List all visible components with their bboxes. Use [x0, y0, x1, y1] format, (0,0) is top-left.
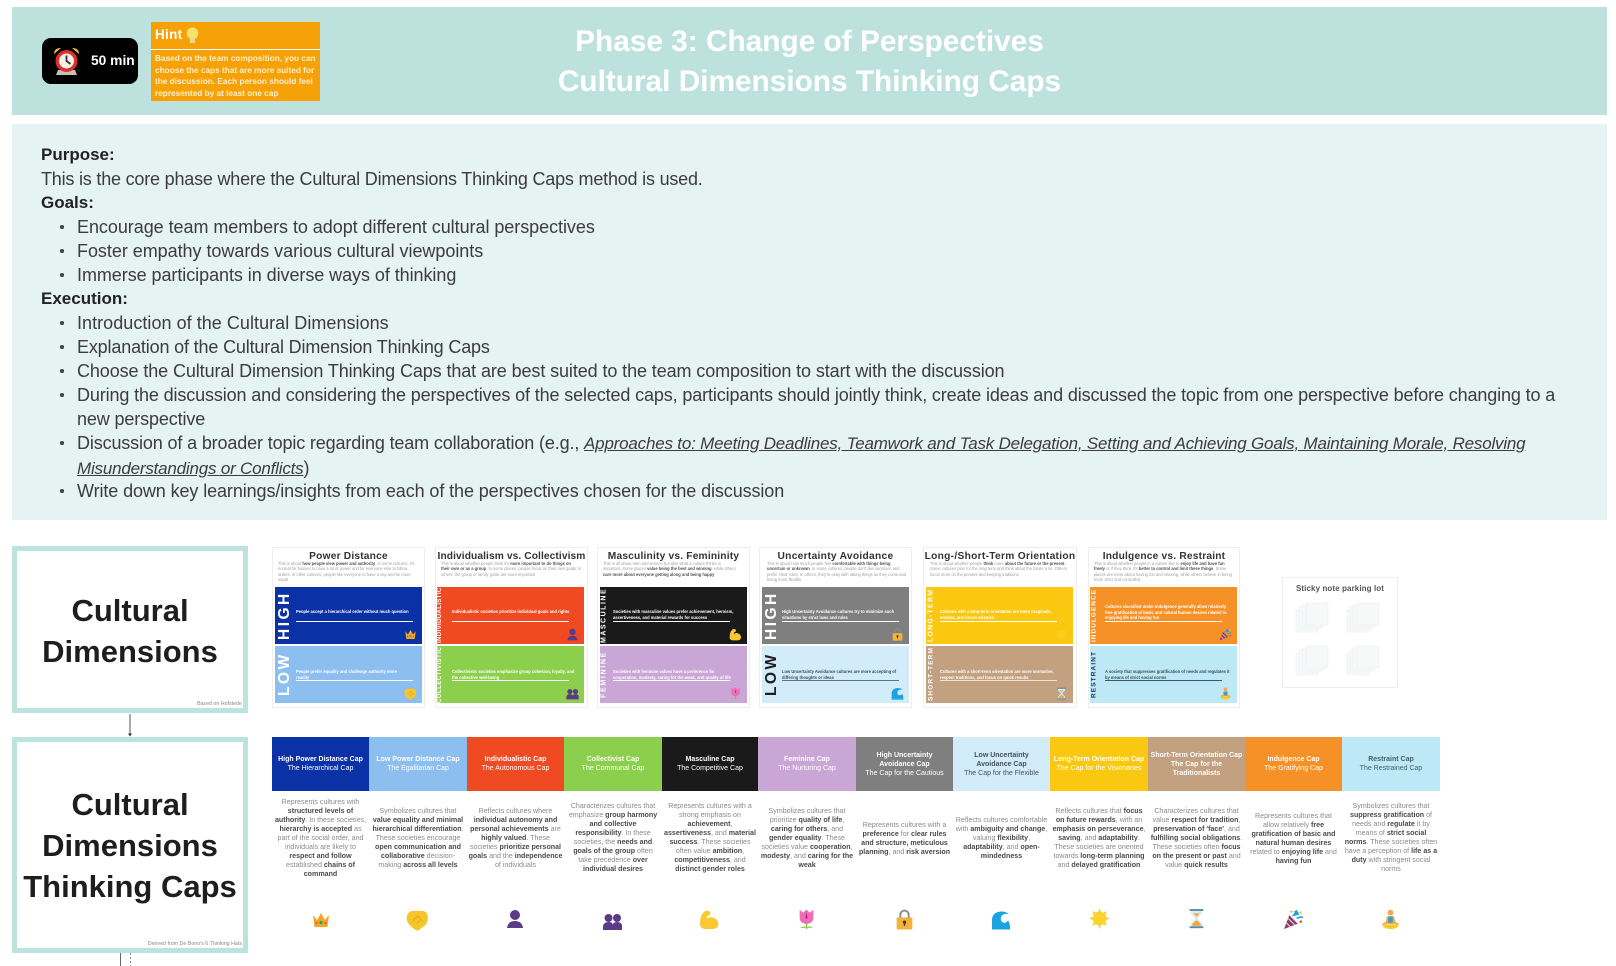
- timer label: 50 min: [91, 53, 135, 68]
- card title: Uncertainty Avoidance: [778, 551, 893, 562]
- cap header: Short-Term Orientation: The Cap for the: [1171, 760, 1222, 768]
- cap text: Indulgence: allow relatively free: [1263, 821, 1324, 829]
- cap text: Masculine: distinct gender roles: [675, 865, 745, 873]
- cap text: Short-Term Orientation: [1150, 807, 1242, 869]
- cap text: Restraint: suppress gratification of: [1350, 811, 1432, 819]
- card description: freely or if they think it's better to control and limit these things. Some: [1094, 566, 1226, 571]
- icon: group of people: [603, 914, 622, 930]
- cap text: Collectivist: responsibility. In these: [575, 829, 651, 837]
- cap text: Collectivist: goals of the group often: [573, 847, 653, 855]
- block: high uncertainty avoidance: [762, 587, 909, 644]
- block: low power distance: People prefer equality and challenge authority more: [296, 669, 397, 674]
- cap header: High Uncertainty Avoidance: Avoidance Cap: [879, 760, 930, 768]
- cap header: Low Power Distance: Low Power Distance Cap: [376, 756, 460, 763]
- text: purpose, goals and execution: Choose the Cultural Dimension Thinking Caps that are best suited to the team composition to start with the discussion: [77, 360, 1004, 380]
- card description: [603, 561, 736, 577]
- cap text: Low Power Distance: Symbolizes cultures that: [380, 807, 456, 815]
- icon: party popper: [1284, 910, 1304, 929]
- block: high uncertainty avoidance: High Uncertainty Avoidance cultures try to minimize such: [782, 609, 894, 614]
- cap header: Restraint: The Restrained Cap: [1360, 765, 1422, 772]
- cap text: High Power Distance: Represents cultures with: [282, 798, 359, 806]
- hint heading: Hint: [155, 27, 182, 42]
- cap header: High Power Distance: The Hierarchical Cap: [288, 765, 353, 772]
- cap text: Restraint: duty with stringent social: [1352, 856, 1430, 864]
- title: Cultural Dimensions Thinking Caps: [558, 65, 1061, 98]
- card: Indulgence vs. Restraint: [1088, 547, 1240, 708]
- cap text: Collectivist: and collective: [590, 820, 636, 828]
- cap text: Masculine: achievement,: [688, 820, 732, 828]
- cap text: Long-Term Orientation: saving, and adaptability.: [1058, 834, 1140, 842]
- cap header: Indulgence: [1245, 737, 1342, 791]
- text: purpose, goals and execution: Execution:: [41, 288, 128, 308]
- card description: This is about whether people think more about the future or the present.: [930, 561, 1066, 566]
- block: masculine: Societies with masculine values prefer achievement, heroism,: [613, 609, 733, 614]
- icon: single person: [507, 910, 523, 928]
- card title: Masculinity vs. Femininity: [608, 551, 739, 562]
- block: high power distance: People accept a hierarchical order without much question: [296, 609, 409, 614]
- block: short-term: SHORT-TERM: [928, 648, 934, 702]
- cap text: High Power Distance: part of the social order, and: [278, 834, 363, 842]
- cap text: Collectivist: take precedence over: [578, 856, 648, 864]
- cap text: Indulgence: [1250, 812, 1337, 865]
- cap text: Short-Term Orientation: value quick results: [1165, 861, 1228, 869]
- cap header: Collectivist: Collectivist Cap: [587, 756, 639, 763]
- cap text: High Power Distance: hierarchy is accepted as: [279, 825, 362, 833]
- cap header: High Uncertainty Avoidance: [856, 737, 953, 791]
- cap text: Low Power Distance: hierarchical differentiation.: [372, 825, 464, 833]
- text: purpose, goals and execution: Goals:: [41, 192, 94, 212]
- cap header: Feminine: Feminine Cap: [784, 756, 830, 763]
- title: [558, 25, 1061, 98]
- block: high power distance: [275, 587, 422, 644]
- icon: wave: [992, 912, 1010, 930]
- cap text: High Uncertainty Avoidance: and structure, meticulous: [861, 839, 948, 847]
- icon: crown: [313, 913, 329, 927]
- cap header: Indulgence: The Gratifying Cap: [1264, 765, 1323, 772]
- cap text: Individualistic: Reflects cultures where: [479, 807, 552, 815]
- cap header: Feminine: [758, 737, 856, 791]
- icon: sun: [1089, 908, 1110, 929]
- text: purpose, goals and execution: Purpose:: [41, 144, 115, 164]
- hint text: Based on the team composition, you can: [155, 53, 316, 63]
- block: restraint: by means of strict social norms: [1105, 675, 1166, 680]
- block: feminine: [600, 646, 747, 703]
- cap text: Long-Term Orientation: [1052, 807, 1146, 869]
- block: feminine: Societies with feminine values have a preference for: [613, 669, 715, 674]
- cap text: Masculine: [664, 802, 756, 873]
- cap text: Low Uncertainty Avoidance: [956, 816, 1047, 860]
- card description: This is all about men and women but also what a culture thinks is: [603, 561, 721, 566]
- icon: alarm clock: [54, 48, 79, 75]
- cap text: Masculine: Represents cultures with a: [668, 802, 752, 810]
- box: Cultural Dimensions Thinking Caps: Cultural: [71, 787, 189, 822]
- block: masculine: assertiveness, and material rewards for success: [613, 615, 707, 620]
- cap text: High Power Distance: [275, 798, 366, 878]
- cap header: Restraint: [1342, 737, 1440, 791]
- block: collectivistic: COLLECTIVISTIC: [437, 646, 443, 703]
- card: Long-/Short-Term Orientation: [923, 547, 1077, 708]
- cap text: Long-Term Orientation: towards long-term planning: [1053, 852, 1145, 860]
- panel: sticky note parking lot: [1282, 577, 1398, 688]
- hint box: [151, 22, 320, 101]
- cap header: High Uncertainty Avoidance: High Uncertainty: [876, 752, 932, 758]
- block: indulgence: enjoying life and having fun: [1105, 615, 1159, 620]
- cap text: Low Uncertainty Avoidance: Reflects cultures comfortable: [956, 816, 1047, 824]
- card description: prefer clear rules. In others, they're okay with taking things as they come and: [767, 572, 906, 577]
- block: high power distance: HIGH: [276, 591, 293, 640]
- block: masculine: MASCULINE: [600, 588, 608, 643]
- cap header: High Power Distance: [272, 737, 369, 791]
- card description: This is about whether people in a culture like to enjoy life and have fun: [1094, 561, 1225, 566]
- cap text: High Uncertainty Avoidance: [859, 821, 950, 856]
- cap header: Long-Term Orientation: The Cap for the Visionaries: [1057, 765, 1141, 772]
- cap text: Restraint: [1345, 802, 1438, 873]
- card description: others, the group or family goals are more important: [441, 572, 535, 577]
- cap text: Short-Term Orientation: Characterizes cultures that: [1154, 807, 1239, 815]
- cap text: Low Power Distance: value equality and minimal: [373, 816, 463, 824]
- cap text: Short-Term Orientation: fulfilling social obligations.: [1151, 834, 1242, 842]
- cap header: Low Uncertainty Avoidance: Low Uncertainty: [974, 752, 1029, 758]
- block: masculine: [600, 587, 747, 644]
- block: low uncertainty avoidance: differing thoughts or ideas: [782, 675, 834, 680]
- attribution: De Bono: Derived from De Bono's 6 Thinking Hats: [148, 941, 242, 947]
- cap header: High Power Distance: High Power Distance Cap: [278, 756, 363, 763]
- cap text: High Uncertainty Avoidance: planning, and risk aversion: [859, 848, 950, 856]
- cap text: High Power Distance: structured levels of: [288, 807, 353, 815]
- block: indulgence: free gratification of basic and natural human desires related to: [1105, 610, 1226, 615]
- box: Cultural Dimensions Thinking Caps: [12, 737, 248, 953]
- cap text: Long-Term Orientation: These societies are oriented: [1054, 843, 1144, 851]
- text: purpose, goals and execution: Explanation of the Cultural Dimension Thinking Caps: [77, 336, 490, 356]
- block: long-term: [926, 587, 1073, 644]
- cap header: Feminine: The Nurturing Cap: [778, 765, 836, 772]
- cap text: Masculine: competitiveness, and: [674, 856, 746, 864]
- cap text: Individualistic: highly valued. These: [481, 834, 550, 842]
- block: low power distance: readily: [296, 675, 309, 680]
- cap text: Feminine: [761, 807, 853, 869]
- block: restraint: RESTRAINT: [1090, 651, 1098, 698]
- cap text: Individualistic: individual autonomy and: [474, 816, 557, 824]
- card description: This is about how people view power and authority. In some cultures, it's: [278, 561, 415, 566]
- card: Uncertainty Avoidance: [759, 547, 912, 708]
- block: collectivistic: [437, 646, 584, 703]
- hint text: the discussion. Each person should feel: [155, 76, 313, 86]
- card description: their own or as a group. In some places, people focus on their own goals; in: [441, 566, 581, 571]
- card description: uncertain or unknown. In some cultures, people don't like surprises and: [767, 566, 900, 571]
- block: collectivistic: the collective well-being: [452, 675, 499, 680]
- card description: being more flexible: [767, 577, 801, 582]
- cap header: Individualistic: Individualistic Cap: [485, 756, 546, 763]
- connector lines below caps box: [120, 953, 131, 966]
- cap header: Low Uncertainty Avoidance: Avoidance Cap: [976, 760, 1027, 768]
- cap header: Low Uncertainty Avoidance: The Cap for the Flexible: [964, 770, 1039, 776]
- text: purpose, goals and execution: [41, 144, 1556, 501]
- block: indulgence: [1090, 587, 1237, 644]
- block: high uncertainty avoidance: HIGH: [763, 591, 780, 640]
- text: purpose, goals and execution: Discussion of a broader topic regarding team collaboration (e.g., Approaches to: Meeting Deadlines, Teamwork and Task Delegation, Setting and Achieving Goals, Maintaining Morale, Resolving: [77, 432, 1525, 452]
- cap text: Long-Term Orientation: and delayed gratification: [1058, 861, 1140, 869]
- icon: lock: [896, 910, 912, 930]
- panel: purpose, goals and execution: [12, 124, 1607, 520]
- cap header: Masculine: The Competitive Cap: [677, 765, 743, 772]
- cap text: Collectivist: emphasize group harmony: [569, 811, 657, 819]
- card description: normal for bosses to have a lot of power and for everyone else to follow: [278, 566, 407, 571]
- block: short-term: Cultures with a short-term orientation are more normative,: [940, 669, 1054, 674]
- block: feminine: cooperation, modesty, caring for the weak, and quality of life: [613, 675, 731, 680]
- cap text: Feminine: societies value cooperation,: [761, 843, 853, 851]
- block: long-term: modest, and future-oriented: [940, 615, 994, 620]
- attribution: Hofstede: Based on Hofstede: [197, 701, 242, 707]
- text: purpose, goals and execution: Immerse participants in diverse ways of thinking: [77, 264, 456, 284]
- cap text: Low Power Distance: open communication and: [375, 843, 461, 851]
- block: long-term: Cultures with a long-term orientation are more pragmatic,: [940, 609, 1052, 614]
- block: short-term: [926, 646, 1073, 703]
- cap text: Short-Term Orientation: These societies often focus: [1153, 843, 1240, 851]
- cap header: Short-Term Orientation: Short-Term Orientation Cap: [1151, 752, 1242, 758]
- cap text: Short-Term Orientation: preservation of 'face', and: [1153, 825, 1240, 833]
- cap header: Restraint: Restraint Cap: [1368, 756, 1414, 763]
- text: purpose, goals and execution: Write down key learnings/insights from each of the perspectives chosen for the discussion: [77, 480, 784, 500]
- cap text: Low Power Distance: These societies encourage: [376, 834, 460, 842]
- cap text: Feminine: caring for others, and: [771, 825, 843, 833]
- cap text: Restraint: Symbolizes cultures that: [1353, 802, 1429, 810]
- cap text: Short-Term Orientation: value respect for tradition,: [1153, 816, 1240, 824]
- cap text: Masculine: often value ambition,: [676, 847, 744, 855]
- cap header: Indulgence: Indulgence Cap: [1267, 756, 1320, 763]
- block: indulgence: Cultures classified under Indulgence generally allow relatively: [1105, 604, 1226, 609]
- cap header: Long-Term Orientation: Long-Term Orientation Cap: [1054, 756, 1144, 763]
- card: Individualism vs. Collectivism: [435, 547, 588, 708]
- cap text: High Power Distance: individuals are likely to: [285, 843, 356, 851]
- cap text: High Uncertainty Avoidance: preference for clear rules: [862, 830, 946, 838]
- cap text: Restraint: needs and regulate it by: [1352, 820, 1430, 828]
- cap text: Restraint: means of strict social: [1356, 829, 1426, 837]
- block: restraint: A society that suppresses gratification of needs and regulates it: [1105, 669, 1230, 674]
- cap header: Short-Term Orientation: [1148, 737, 1245, 791]
- cap text: High Power Distance: respect and follow: [289, 852, 352, 860]
- card description: [278, 561, 415, 582]
- hint text: represented by at least one cap: [155, 88, 278, 98]
- header band: [12, 7, 1607, 115]
- cap text: Collectivist: societies, the needs and: [574, 838, 652, 846]
- cap text: Feminine: modesty, and caring for the: [761, 852, 853, 860]
- cap text: Feminine: Symbolizes cultures that: [769, 807, 845, 815]
- card: Masculinity vs. Femininity: [597, 547, 750, 708]
- cap header: Collectivist: The Communal Cap: [582, 765, 644, 772]
- icon: person meditating: [1382, 910, 1400, 929]
- cap text: Low Power Distance: [372, 807, 464, 869]
- cap text: Masculine: success. These societies: [669, 838, 751, 846]
- block: individualistic: INDIVIDUALISTIC: [437, 588, 443, 643]
- cap text: Low Uncertainty Avoidance: valuing flexibility,: [973, 834, 1030, 842]
- title: Phase 3: Change of Perspectives: [575, 25, 1044, 58]
- card description: places are more about having fun and relaxing, while others believe in being: [1094, 572, 1232, 577]
- cap text: Long-Term Orientation: emphasis on perseverance,: [1052, 825, 1146, 833]
- text: purpose, goals and execution: During the discussion and considering the perspectives of the selected caps, participants should jointly think, create ideas and discussed the topic from one perspective before changing to a: [77, 384, 1555, 404]
- cap text: Restraint: norms. These societies often: [1345, 838, 1437, 846]
- card description: This is about how much people feel comfortable with things being: [767, 561, 891, 566]
- block: individualistic: [437, 587, 584, 644]
- text: purpose, goals and execution: Foster empathy towards various cultural viewpoints: [77, 240, 483, 260]
- card description: orders. In other cultures, people like everyone to have a say and be more: [278, 572, 411, 577]
- text: purpose, goals and execution: Introduction of the Cultural Dimensions: [77, 312, 389, 332]
- cap text: Restraint: have a perception of life as a: [1345, 847, 1437, 855]
- block: long-term: LONG-TERM: [928, 589, 934, 642]
- cap text: Masculine: assertiveness, and material: [664, 829, 756, 837]
- icon: flexed biceps: [700, 910, 718, 929]
- cap text: Indulgence: related to enjoying life and: [1250, 848, 1337, 856]
- block: collectivistic: Collectivistic societies emphasize group cohesion, loyalty, and: [452, 669, 574, 674]
- card description: Some cultures plan for the long term and think about the future a lot. Others: [930, 566, 1067, 571]
- card title: Individualism vs. Collectivism: [438, 551, 585, 562]
- text: purpose, goals and execution: This is the core phase where the Cultural Dimensions Thinking Caps method is used.: [41, 168, 703, 188]
- cap text: High Power Distance: established chains of: [286, 861, 355, 869]
- icon: tulip: [800, 910, 814, 929]
- icon: handshake: [406, 910, 428, 930]
- parking lot heading: Sticky note parking lot: [1296, 584, 1384, 593]
- cap text: Long-Term Orientation: Reflects cultures that focus: [1055, 807, 1143, 815]
- cap header: Collectivist: [564, 737, 662, 791]
- cap text: Short-Term Orientation: on the present or past and: [1152, 852, 1241, 860]
- card description: [441, 561, 582, 577]
- cap text: Low Uncertainty Avoidance: mindedness: [981, 852, 1022, 860]
- block: low power distance: LOW: [276, 653, 293, 696]
- cap text: Indulgence: natural human desires: [1256, 839, 1331, 847]
- cap text: Masculine: strong emphasis on: [679, 811, 741, 819]
- block: short-term: respect traditions, and focus on quick results: [940, 675, 1028, 680]
- cap text: High Uncertainty Avoidance: Represents cultures with a: [863, 821, 946, 829]
- cap text: Low Power Distance: collaborative decision-: [381, 852, 455, 860]
- cap text: Indulgence: having fun: [1276, 857, 1311, 865]
- block: low uncertainty avoidance: LOW: [763, 653, 780, 696]
- cap header: Masculine: [662, 737, 758, 791]
- cap header: Low Uncertainty Avoidance: [953, 737, 1050, 791]
- box: Cultural Dimensions Thinking Caps: Dimensions: [42, 828, 218, 863]
- cap text: Collectivist: individual desires: [583, 865, 643, 873]
- text: purpose, goals and execution: Misunderstandings or Conflicts): [77, 458, 309, 478]
- text: purpose, goals and execution: Encourage team members to adopt different cultural perspectives: [77, 216, 595, 236]
- box: Cultural Dimensions Thinking Caps: Thinking Caps: [23, 869, 237, 904]
- card: Power Distance: [272, 547, 425, 708]
- cap text: Restraint: norms: [1381, 865, 1401, 873]
- cap header: Individualistic: [467, 737, 564, 791]
- icon: hourglass: [1190, 909, 1204, 928]
- box: Cultural Dimensions: Cultural: [71, 593, 189, 628]
- cap header: Long-Term Orientation: [1050, 737, 1148, 791]
- card description: This is about whether people think it's more important to do things on: [441, 561, 571, 566]
- box: Cultural Dimensions: [12, 546, 248, 713]
- cap text: Feminine: prioritize quality of life,: [770, 816, 844, 824]
- cap text: High Power Distance: command: [304, 870, 337, 878]
- block: restraint: [1090, 646, 1237, 703]
- cap header: Individualistic: The Autonomous Cap: [482, 765, 549, 772]
- block: feminine: FEMININE: [600, 651, 608, 698]
- hint text: [151, 49, 320, 101]
- cap header: Low Power Distance: The Egalitarian Cap: [387, 765, 449, 772]
- block: low uncertainty avoidance: Low Uncertainty Avoidance cultures are more accepting of: [782, 669, 896, 674]
- cap text: Collectivist: [569, 802, 658, 873]
- card description: important. Some places value being the best and winning, while others: [603, 566, 736, 571]
- cap text: High Power Distance: authority. In these societies,: [275, 816, 366, 824]
- cap text: Collectivist: Characterizes cultures that: [571, 802, 655, 810]
- block: low uncertainty avoidance: [762, 646, 909, 703]
- block: indulgence: INDULGENCE: [1090, 589, 1098, 642]
- card title: Power Distance: [309, 551, 388, 562]
- cap text: Feminine: gender equality. These: [769, 834, 845, 842]
- cap text: Indulgence: gratification of basic and: [1252, 830, 1335, 838]
- cap header: Low Power Distance: [369, 737, 467, 791]
- cap header: High Uncertainty Avoidance: The Cap for the Cautious: [865, 770, 944, 776]
- hint text: choose the caps that are more suited for: [155, 64, 314, 74]
- card description: equal: [278, 577, 288, 582]
- arrow: dimensions to caps: [128, 714, 132, 736]
- box: Cultural Dimensions: Dimensions: [42, 634, 218, 669]
- cap text: Individualistic: goals and the independence: [469, 852, 562, 860]
- cap text: Low Uncertainty Avoidance: adaptability, and open-: [963, 843, 1040, 851]
- timer badge: [42, 38, 138, 84]
- card description: more strict and controlled: [1094, 577, 1140, 582]
- card description: [1094, 561, 1232, 582]
- card description: care more about everyone getting along and being happy: [603, 572, 714, 577]
- cap header: Short-Term Orientation: Traditionalists: [1173, 770, 1220, 776]
- block: individualistic: Individualistic societies prioritize individual goals and rights: [452, 609, 569, 614]
- cap text: Individualistic: societies prioritize personal: [470, 843, 561, 851]
- card description: focus more on the present and keeping traditions: [930, 572, 1019, 577]
- cap text: Low Uncertainty Avoidance: with ambiguity and change,: [956, 825, 1047, 833]
- card title: Long-/Short-Term Orientation: [925, 551, 1075, 562]
- block: high uncertainty avoidance: situations by strict laws and rules: [782, 615, 848, 620]
- cap text: Individualistic: personal achievements are: [470, 825, 561, 833]
- block: low power distance: [275, 646, 422, 703]
- cap text: Long-Term Orientation: on future rewards, with an: [1056, 816, 1142, 824]
- card description: [767, 561, 906, 582]
- cap text: Individualistic: [468, 807, 562, 869]
- cap text: Individualistic: of individuals: [495, 861, 536, 869]
- cap text: Feminine: weak: [798, 861, 816, 869]
- sticky note stacks: [1296, 602, 1380, 676]
- card description: [930, 561, 1067, 577]
- card title: Indulgence vs. Restraint: [1103, 551, 1225, 562]
- text: purpose, goals and execution: new perspective: [77, 408, 205, 428]
- cap header: Masculine: Masculine Cap: [685, 756, 734, 763]
- icon: light bulb: [186, 28, 198, 43]
- cap text: Low Power Distance: making across all levels: [378, 861, 458, 869]
- cap text: Indulgence: Represents cultures that: [1255, 812, 1332, 820]
